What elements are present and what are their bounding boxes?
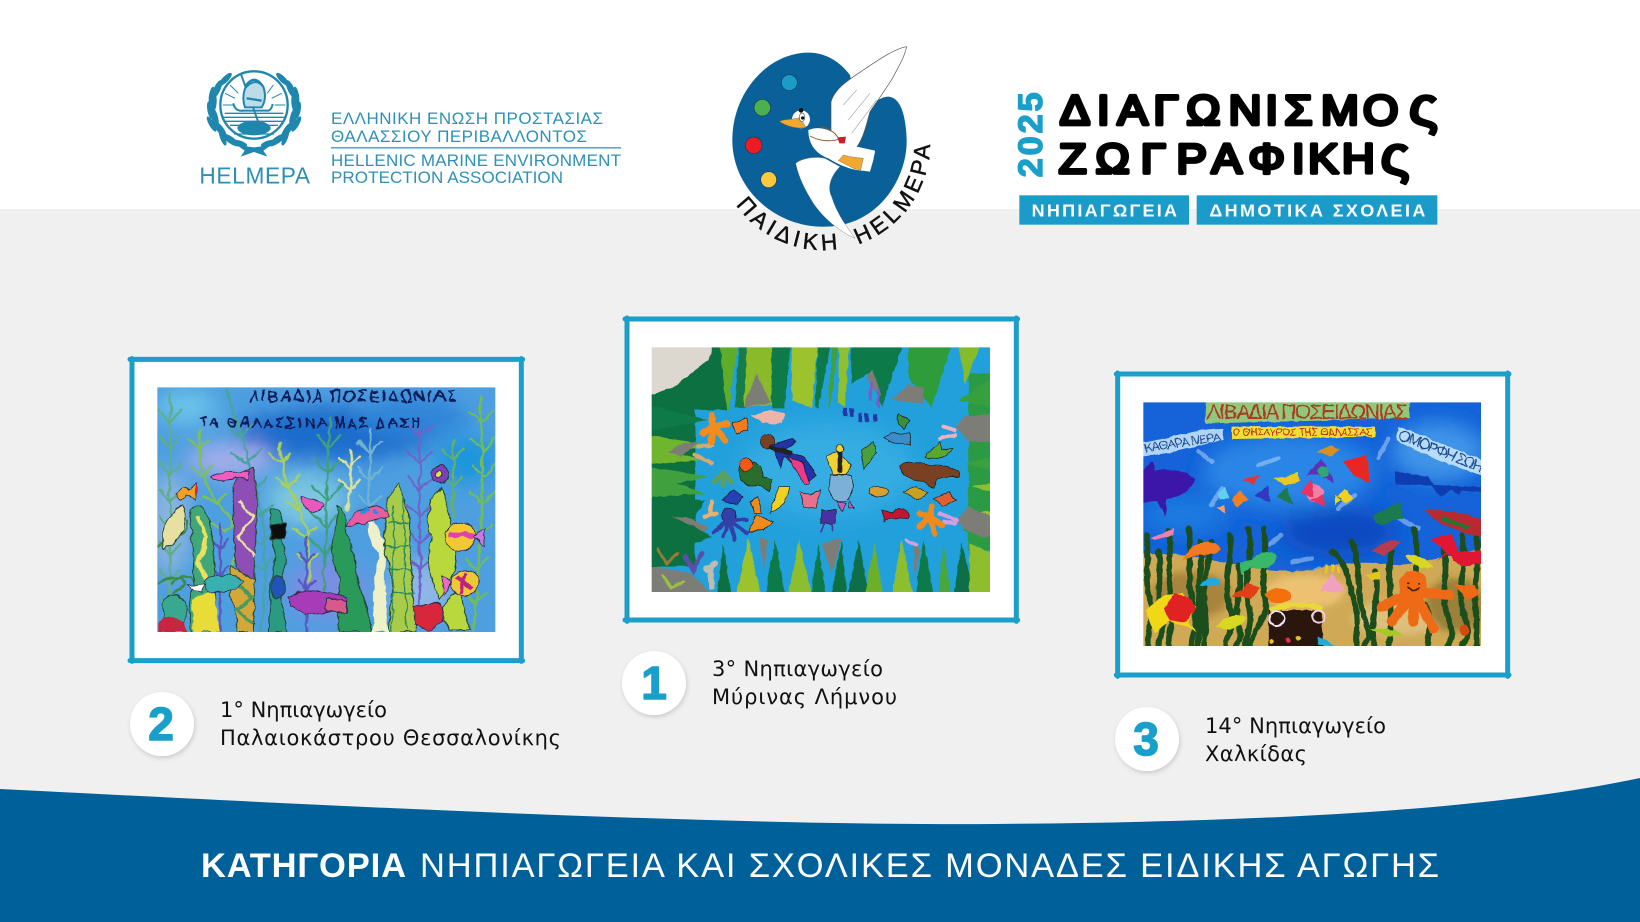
text: category line: ΝΗΠΙΑΓΩΓΕΙΑ ΚΑΙ ΣΧΟΛΙΚΕΣ ΜΟΝΑΔΕΣ ΕΙΔΙΚΗΣ ΑΓΩΓΗΣ [420,847,1439,885]
badge: primary schools [1197,195,1437,225]
text: association name in Greek and English: ΘΑΛΑΣΣΙΟΥ ΠΕΡΙΒΑΛΛΟΝΤΟΣ [331,127,587,146]
icon: palette [732,53,907,227]
painted words [199,389,456,430]
treasure chest [1268,605,1335,652]
text: HELMEPA wordmark: HELMEPA [199,162,311,188]
icon: white gull [779,47,907,238]
badge: primary schools: ΔΗΜΟΤΙΚΑ ΣΧΟΛΕΙΑ [1209,201,1425,221]
painted banners: ΛΙΒΑΔΙΑ ΠΟΣΕΙΔΩΝΙΑΣ [1207,400,1408,424]
painting: colourful reef, octopus and treasure chest [1143,402,1481,646]
text: rank 2 school [220,698,561,750]
logo: HELMEPA association [199,71,311,188]
text: association name in Greek and English [331,109,621,187]
painted banners [1138,398,1498,481]
badge: kindergartens [1019,195,1189,225]
text: association name in Greek and English: PROTECTION ASSOCIATION [331,168,563,187]
icon: HELMEPA emblem with laurel wreath [205,71,303,157]
text: category line: ΚΑΤΗΓΟΡΙΑ [201,847,406,885]
painted words: ΤΑ ΘΑΛΑΣΣΙΝΑ ΜΑΣ ΔΑΣΗ [199,414,421,430]
text: rank 3 school: Χαλκίδας [1205,742,1307,766]
text: rank 3 school [1205,714,1386,766]
logo: Paidiki HELMEPA palette and gull [732,46,930,251]
text: curved logo caption [736,144,930,251]
text: rank 2 school: 1° Νηπιαγωγείο [220,698,387,722]
sand [1143,548,1481,646]
text: rank 1 school [712,657,897,709]
text: rank 1 school: Μύρινας Λήμνου [712,685,897,709]
heading: ΖΩΓΡΑΦΙΚΗΣ: ς [1380,125,1410,186]
frame [625,318,1018,621]
green meadow border [652,347,990,592]
panel: first place artwork [625,318,1018,621]
panel: third place artwork [1116,373,1509,676]
fish and creatures [1138,445,1498,637]
text: rank 1 school: 3° Νηπιαγωγείο [712,657,883,681]
badge: rank 3: 3 [1133,713,1159,765]
heading: ΖΩΓΡΑΦΙΚΗΣ: ΖΩΓΡΑΦΙΚΗ [1059,137,1375,183]
rocks and seaweed [652,347,990,592]
frame [1116,373,1509,676]
painting: posidonia meadow with tall seaweed [157,387,496,632]
text: year 2025: 2025 [1012,92,1050,177]
panel: second place artwork [130,359,523,661]
text: curved logo caption: HELMEPA [853,144,930,244]
text: rank 3 school: 14° Νηπιαγωγείο [1205,714,1386,738]
text: curved logo caption: ΠΑΙΔΙΚΗ [736,196,836,251]
painted banners: ΚΑΘΑΡΑ ΝΕΡΑ [1143,429,1222,455]
painting: divers and sea creatures among green meadow [652,347,990,592]
kelp [1147,528,1477,652]
text: rank 2 school: Παλαιοκάστρου Θεσσαλονίκης [220,726,561,750]
icon: paint dots [745,75,797,188]
text: association name in Greek and English: ΕΛΛΗΝΙΚΗ ΕΝΩΣΗ ΠΡΟΣΤΑΣΙΑΣ [331,109,603,128]
fish [176,465,485,632]
text: association name in Greek and English: HELLENIC MARINE ENVIRONMENT [331,151,621,170]
badge: rank 2: 2 [148,698,174,750]
badge: rank 3 [1115,707,1179,771]
badge: rank 1 [622,651,686,715]
footer: blue wave band [0,778,1640,922]
heading: ΔΙΑΓΩΝΙΣΜΟΣ: ς [1409,76,1438,137]
coral columns [158,467,470,632]
heading: ΔΙΑΓΩΝΙΣΜΟΣ: ΔΙΑΓΩΝΙΣΜΟ [1060,89,1398,134]
painted words: ΛΙΒΑΔΙΑ ΠΟΣΕΙΔΩΝΙΑΣ [249,389,456,406]
badge: rank 1: 1 [641,657,667,709]
painted banners: Ο ΘΗΣΑΥΡΟΣ ΤΗΣ ΘΑΛΑΣΣΑΣ [1232,428,1372,439]
sea creatures [703,408,960,540]
logo: contest title [1012,76,1438,225]
frame [130,359,523,661]
badge: kindergartens: ΝΗΠΙΑΓΩΓΕΙΑ [1032,201,1177,221]
painted banners: ΟΜΟΡΦΗ ΣΩΗ [1396,427,1486,476]
seaweed [158,390,496,632]
badge: rank 2 [130,692,194,756]
orange octopus [1382,576,1450,628]
